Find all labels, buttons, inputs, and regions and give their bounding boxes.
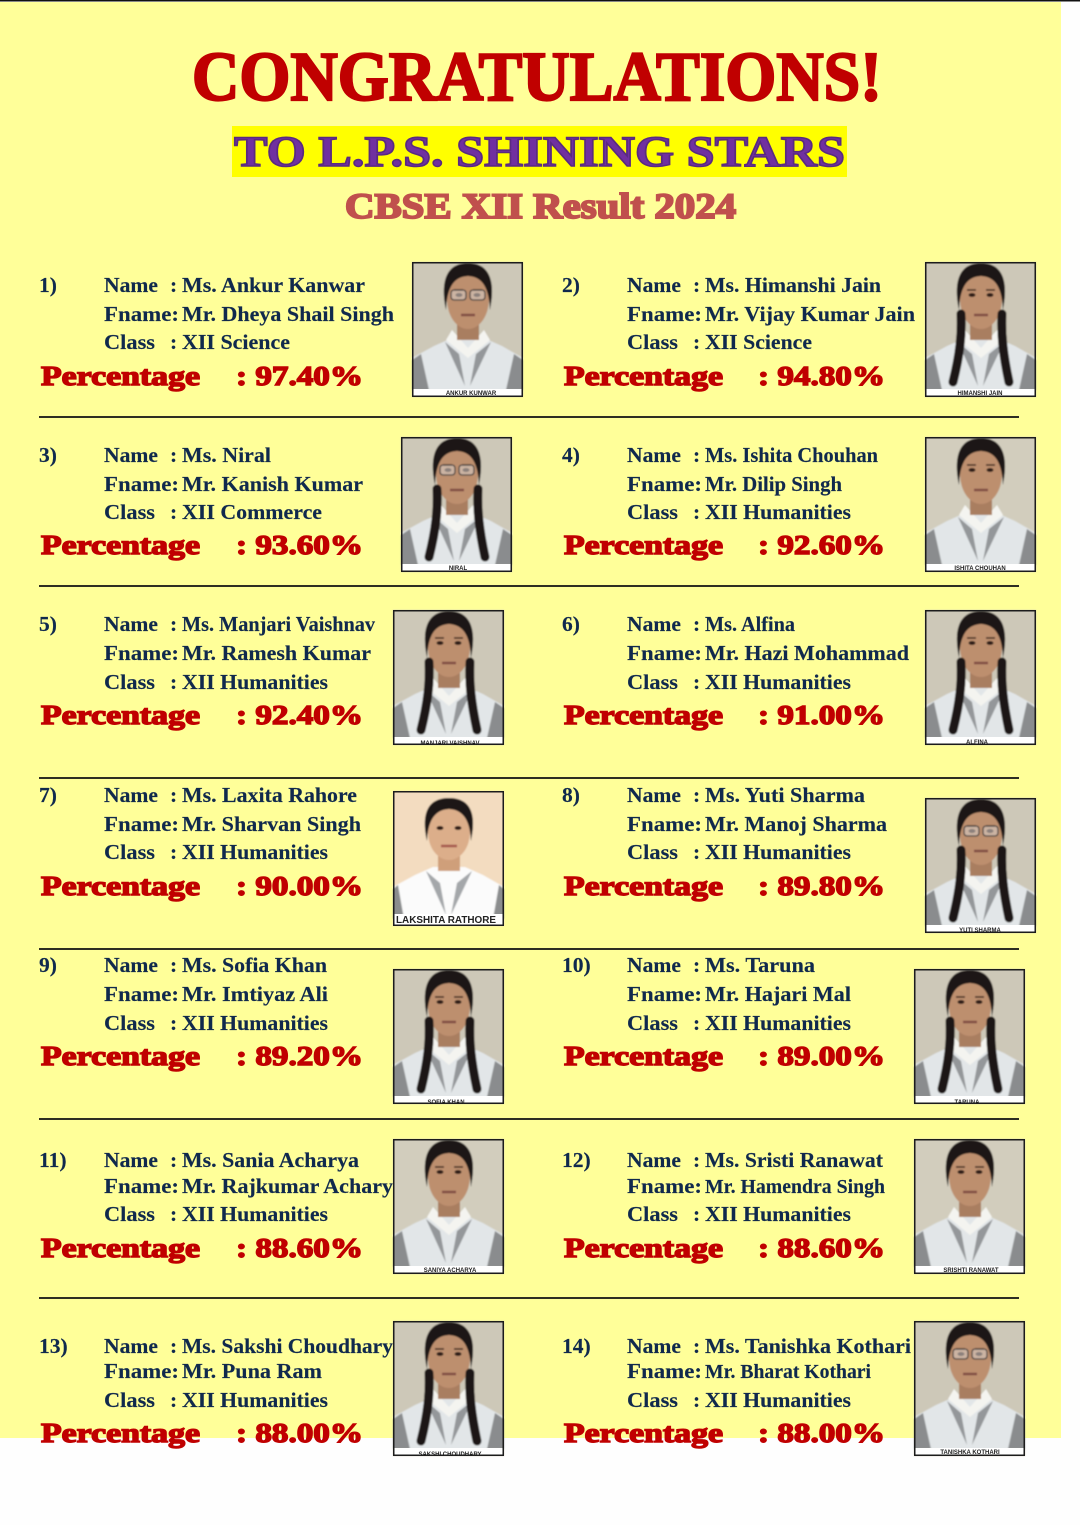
photo 12 <box>914 1139 1025 1274</box>
student 4: Mr. Dilip Singh <box>705 472 842 496</box>
student 3: XII Commerce <box>182 500 322 524</box>
student 6 <box>562 610 1036 746</box>
student 1: Class <box>104 330 155 354</box>
student 11: : <box>170 1148 177 1172</box>
student 14: : 88.00% <box>758 1417 885 1448</box>
student 5: Class <box>104 670 155 694</box>
photo 7 <box>393 791 504 926</box>
student 1 <box>39 262 523 397</box>
student 3: Class <box>104 500 155 524</box>
student 8: Fname: <box>627 812 702 836</box>
student 13: Fname: <box>104 1359 179 1383</box>
student 11: Mr. Rajkumar Achary <box>182 1174 393 1198</box>
student 12: 12) <box>562 1148 591 1172</box>
student 4: : 92.60% <box>758 529 885 560</box>
student 9: 9) <box>39 953 57 977</box>
student 13: : 88.00% <box>236 1417 363 1448</box>
student 1: : 97.40% <box>236 360 363 391</box>
photo 14 <box>914 1321 1025 1456</box>
student 5: Percentage <box>41 699 200 730</box>
photo 6: ALFINA <box>966 740 989 746</box>
student 1: Name <box>104 273 158 297</box>
student 1: Fname: <box>104 302 179 326</box>
student 1: Mr. Dheya Shail Singh <box>182 302 394 326</box>
student 8: : 89.80% <box>758 870 885 901</box>
student 13: Percentage <box>41 1417 200 1448</box>
photo 6 <box>925 610 1036 746</box>
student 13: Mr. Puna Ram <box>182 1359 322 1383</box>
student 5: Fname: <box>104 641 179 665</box>
student 7: Percentage <box>41 870 200 901</box>
photo 4 <box>925 437 1036 572</box>
student 14: 14) <box>562 1334 591 1358</box>
student 9: Class <box>104 1011 155 1035</box>
student 12: Percentage <box>564 1232 723 1263</box>
student 4: Ms. Ishita Chouhan <box>705 443 878 467</box>
student 7: Fname: <box>104 812 179 836</box>
photo 9 <box>393 969 504 1106</box>
student 1: 1) <box>39 273 57 297</box>
student 2: : 94.80% <box>758 360 885 391</box>
student 11: Name <box>104 1148 158 1172</box>
student 12: : <box>693 1148 700 1172</box>
student 6: : <box>693 612 700 636</box>
student 6: : <box>693 670 700 694</box>
student 5: 5) <box>39 612 57 636</box>
photo 10: TARUNA <box>955 1100 980 1106</box>
student 7: Class <box>104 840 155 864</box>
student 2: Percentage <box>564 360 723 391</box>
photo 14: TANISHKA KOTHARI <box>940 1450 1000 1456</box>
student 3: Ms. Niral <box>182 443 271 467</box>
student 10: 10) <box>562 953 591 977</box>
student 10: Name <box>627 953 681 977</box>
student 6: : 91.00% <box>758 699 885 730</box>
student 14: XII Humanities <box>705 1388 851 1412</box>
student 8: : <box>693 783 700 807</box>
student 3: Percentage <box>41 529 200 560</box>
student 9: Ms. Sofia Khan <box>182 953 327 977</box>
student 11: Fname: <box>104 1174 179 1198</box>
student 8: Name <box>627 783 681 807</box>
student 13: Ms. Sakshi Choudhary <box>182 1334 393 1358</box>
student 5: Name <box>104 612 158 636</box>
student 4 <box>562 437 1036 572</box>
student 9: : 89.20% <box>236 1040 363 1071</box>
student 8: Ms. Yuti Sharma <box>705 783 865 807</box>
student 13: 13) <box>39 1334 68 1358</box>
student 1: Percentage <box>41 360 200 391</box>
student 5 <box>39 610 504 747</box>
student 13: XII Humanities <box>182 1388 328 1412</box>
student 14: Name <box>627 1334 681 1358</box>
student 8 <box>562 783 1036 934</box>
student 10: : 89.00% <box>758 1040 885 1071</box>
student 5: Mr. Ramesh Kumar <box>182 641 371 665</box>
student 11: Percentage <box>41 1232 200 1263</box>
student 10: Ms. Taruna <box>705 953 815 977</box>
student 1: : <box>170 330 177 354</box>
student 14: : <box>693 1388 700 1412</box>
student 4: 4) <box>562 443 580 467</box>
student 3: : 93.60% <box>236 529 363 560</box>
student 2: Fname: <box>627 302 702 326</box>
student 6: Percentage <box>564 699 723 730</box>
photo 8: YUTI SHARMA <box>959 928 1001 934</box>
student 10 <box>562 953 1025 1106</box>
photo 4: ISHITA CHOUHAN <box>954 566 1006 572</box>
photo 10 <box>914 969 1025 1106</box>
student 11: XII Humanities <box>182 1202 328 1226</box>
student 8: Class <box>627 840 678 864</box>
student 7: XII Humanities <box>182 840 328 864</box>
student 10: : <box>693 953 700 977</box>
student 4: : <box>693 443 700 467</box>
student 4: Percentage <box>564 529 723 560</box>
student 6: Mr. Hazi Mohammad <box>705 641 909 665</box>
student 7: Name <box>104 783 158 807</box>
student 5: : <box>170 670 177 694</box>
photo 8 <box>925 798 1036 934</box>
photo 5 <box>393 610 504 747</box>
student 3 <box>39 437 512 572</box>
student 10: Percentage <box>564 1040 723 1071</box>
student 6: XII Humanities <box>705 670 851 694</box>
student 7: Mr. Sharvan Singh <box>182 812 361 836</box>
student 2: Class <box>627 330 678 354</box>
student 3: : <box>170 500 177 524</box>
student 12: Name <box>627 1148 681 1172</box>
student 7: : 90.00% <box>236 870 363 901</box>
student 10: XII Humanities <box>705 1011 851 1035</box>
student 14: Class <box>627 1388 678 1412</box>
student 1: Ms. Ankur Kanwar <box>182 273 365 297</box>
student 13: Class <box>104 1388 155 1412</box>
student 3: : <box>170 443 177 467</box>
student 4: Class <box>627 500 678 524</box>
student 7: : <box>170 783 177 807</box>
student 13: Name <box>104 1334 158 1358</box>
student 9 <box>39 953 504 1106</box>
student 13: : <box>170 1334 177 1358</box>
student 2: 2) <box>562 273 580 297</box>
student 13 <box>39 1321 504 1458</box>
student 10: Mr. Hajari Mal <box>705 982 851 1006</box>
student 6: Class <box>627 670 678 694</box>
student 7: : <box>170 840 177 864</box>
student 12: : 88.60% <box>758 1232 885 1263</box>
photo 13 <box>393 1321 504 1458</box>
student 9: XII Humanities <box>182 1011 328 1035</box>
result heading: CBSE XII Result 2024 <box>345 186 736 226</box>
student 10: : <box>693 1011 700 1035</box>
photo 3: NIRAL <box>449 566 467 572</box>
student 11: : <box>170 1202 177 1226</box>
student 9: : <box>170 1011 177 1035</box>
student 2: Mr. Vijay Kumar Jain <box>705 302 915 326</box>
subtitle banner: TO L.P.S. SHINING STARS <box>234 129 845 176</box>
student 2: Name <box>627 273 681 297</box>
student 8: XII Humanities <box>705 840 851 864</box>
photo 7: LAKSHITA RATHORE <box>396 915 496 926</box>
student 4: : <box>693 500 700 524</box>
student 2: : <box>693 330 700 354</box>
student 3: Mr. Kanish Kumar <box>182 472 363 496</box>
student 1: XII Science <box>182 330 290 354</box>
student 6: 6) <box>562 612 580 636</box>
student 2 <box>562 262 1036 397</box>
student 2: : <box>693 273 700 297</box>
photo 5: MANJARI VAISHNAV <box>420 741 480 747</box>
title: CONGRATULATIONS! <box>192 39 882 116</box>
student 12: Mr. Hamendra Singh <box>705 1176 885 1198</box>
student 11: : 88.60% <box>236 1232 363 1263</box>
student 4: XII Humanities <box>705 500 851 524</box>
student 11 <box>39 1139 504 1274</box>
photo 11 <box>393 1139 504 1274</box>
student 4: Name <box>627 443 681 467</box>
student 5: Ms. Manjari Vaishnav <box>182 612 375 636</box>
student 3: 3) <box>39 443 57 467</box>
student 12: Ms. Sristi Ranawat <box>705 1148 884 1172</box>
student 12: : <box>693 1202 700 1226</box>
student 14: Mr. Bharat Kothari <box>705 1361 871 1383</box>
student 10: Class <box>627 1011 678 1035</box>
student 10: Fname: <box>627 982 702 1006</box>
student 12: XII Humanities <box>705 1202 851 1226</box>
student 9: Mr. Imtiyaz Ali <box>182 982 328 1006</box>
student 5: XII Humanities <box>182 670 328 694</box>
student 9: Fname: <box>104 982 179 1006</box>
student 2: XII Science <box>705 330 812 354</box>
student 3: Name <box>104 443 158 467</box>
photo 2 <box>925 262 1036 397</box>
student 5: : <box>170 612 177 636</box>
student 7: Ms. Laxita Rahore <box>182 783 357 807</box>
photo 9: SOFIA KHAN <box>427 1100 465 1106</box>
student 14: : <box>693 1334 700 1358</box>
student 11: Ms. Sania Acharya <box>182 1148 359 1172</box>
student 14: Ms. Tanishka Kothari <box>705 1334 911 1358</box>
student 2: Ms. Himanshi Jain <box>705 273 881 297</box>
photo 11: SANIYA ACHARYA <box>424 1268 477 1274</box>
student 6: Fname: <box>627 641 702 665</box>
student 1: : <box>170 273 177 297</box>
student 7 <box>39 783 504 926</box>
photo 2: HIMANSHI JAIN <box>957 391 1003 397</box>
student 11: 11) <box>39 1148 66 1172</box>
photo 3 <box>401 437 512 572</box>
student 9: Percentage <box>41 1040 200 1071</box>
student 6: Ms. Alfina <box>705 612 795 636</box>
student 12: Fname: <box>627 1174 702 1198</box>
student 8: 8) <box>562 783 580 807</box>
student 12 <box>562 1139 1025 1274</box>
student 4: Fname: <box>627 472 702 496</box>
student 8: Percentage <box>564 870 723 901</box>
student 11: Class <box>104 1202 155 1226</box>
student 14: Fname: <box>627 1359 702 1383</box>
photo 12: SRISHTI RANAWAT <box>943 1268 999 1274</box>
student 9: Name <box>104 953 158 977</box>
student 13: : <box>170 1388 177 1412</box>
student 14: Percentage <box>564 1417 723 1448</box>
photo 1 <box>412 262 523 397</box>
student 5: : 92.40% <box>236 699 363 730</box>
student 14 <box>562 1321 1025 1456</box>
student 12: Class <box>627 1202 678 1226</box>
student 8: : <box>693 840 700 864</box>
photo 1: ANKUR KUNWAR <box>446 391 497 397</box>
student 9: : <box>170 953 177 977</box>
student 3: Fname: <box>104 472 179 496</box>
photo 13: SAKSHI CHOUDHARY <box>418 1452 482 1458</box>
student 8: Mr. Manoj Sharma <box>705 812 887 836</box>
student 6: Name <box>627 612 681 636</box>
student 7: 7) <box>39 783 57 807</box>
